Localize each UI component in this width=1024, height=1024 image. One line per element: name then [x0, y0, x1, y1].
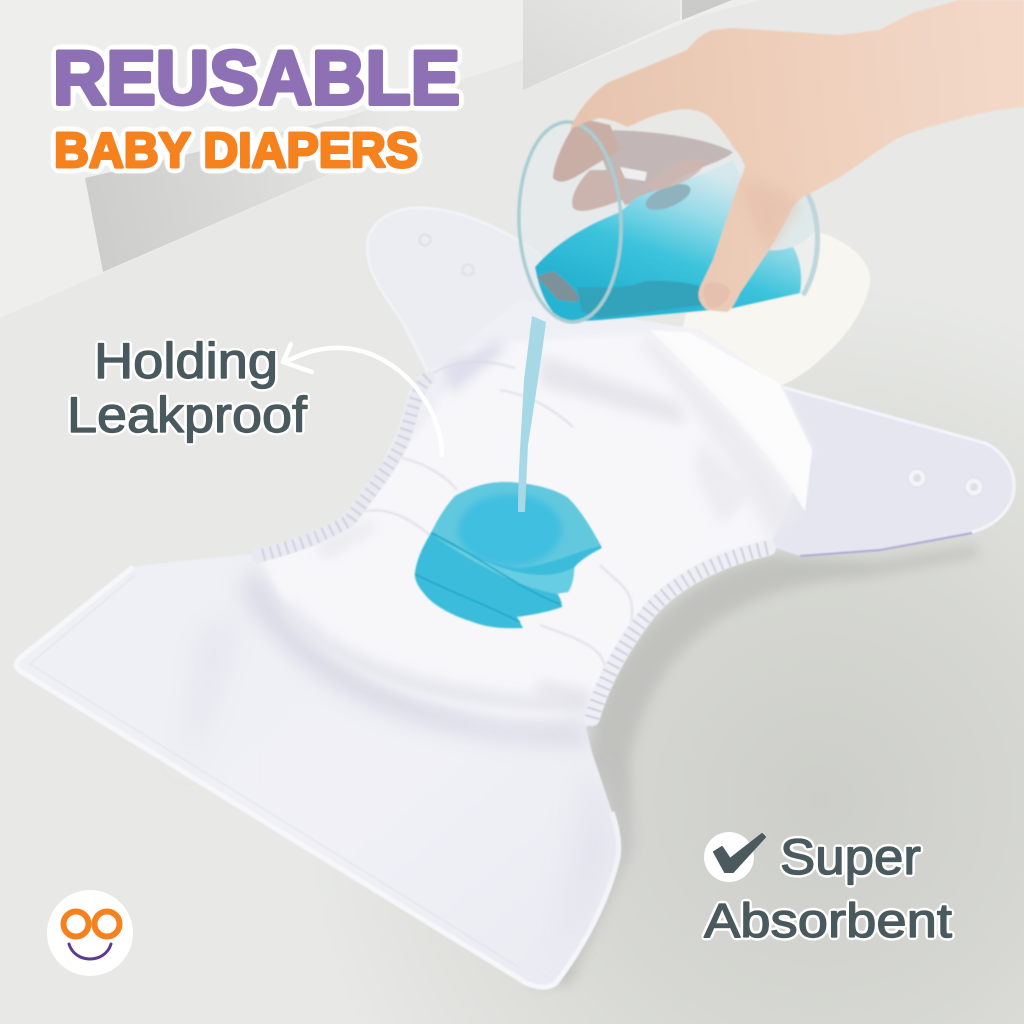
hand and arm — [570, 0, 1024, 312]
callout: super absorbent — [704, 829, 952, 948]
flap stitched rim — [16, 567, 619, 987]
stain crease — [415, 533, 560, 622]
lower fabric shading — [280, 600, 590, 714]
stain deep core — [458, 494, 562, 566]
right wing purple edge — [800, 533, 972, 556]
label line 2: Absorbent — [704, 895, 952, 948]
flap inner stitching — [30, 575, 520, 968]
subheading: baby diapers: BABY DIAPERS — [54, 124, 418, 178]
snap button right 1 — [908, 469, 926, 487]
diaper — [16, 208, 1014, 988]
left elastic gather — [258, 378, 428, 556]
snap button left 1 — [420, 234, 430, 246]
left elastic ridges — [258, 378, 428, 556]
label line 1: Holding — [94, 333, 278, 389]
liquid in glass — [535, 160, 801, 322]
main body and front flap — [16, 300, 812, 988]
pale reflection on glass — [645, 159, 705, 190]
top right fold — [650, 330, 812, 512]
back cream insert pad — [680, 230, 870, 386]
water stream — [518, 316, 546, 512]
callout: holding leakproof — [67, 333, 442, 455]
logo: smiley badge — [47, 890, 133, 976]
snap button left 2 — [462, 264, 474, 276]
flap soft creases — [185, 610, 615, 960]
pale glass end above liquid — [745, 170, 815, 250]
left back wing — [367, 208, 560, 420]
thumb reflection in liquid — [642, 179, 694, 215]
stain light upper zone — [432, 482, 600, 568]
title — [53, 36, 460, 178]
thumb nail shading — [703, 282, 730, 308]
heading: reusable: REUSABLE — [53, 36, 460, 121]
icon: check mark — [704, 832, 765, 882]
blue liquid stain — [415, 482, 602, 628]
right wing — [720, 387, 1014, 556]
right elastic gather — [592, 548, 768, 718]
glass and hand — [516, 0, 1024, 324]
label line 1: Super — [780, 829, 921, 885]
dark teal reflection — [577, 281, 703, 318]
center fabric folds — [315, 340, 750, 712]
arrow pointing to label — [283, 344, 442, 455]
label line 2: Leakproof — [67, 387, 307, 443]
glass rim — [516, 120, 624, 324]
inner pocket shadow crescent — [240, 565, 590, 745]
snap button right 2 — [965, 478, 983, 496]
diaper shadow on table — [530, 545, 980, 985]
white glass highlight — [620, 167, 647, 181]
palm crease shadow — [740, 180, 800, 250]
stain lower light band — [432, 535, 573, 594]
inner white fabric — [262, 330, 812, 716]
palm through glass — [600, 130, 733, 205]
finger through glass 2 — [572, 170, 630, 211]
fold shadow — [640, 335, 803, 540]
right elastic ridges — [592, 548, 768, 718]
glass body — [517, 123, 817, 322]
right wing rim — [782, 387, 1014, 532]
gather crease lines — [360, 362, 632, 690]
finger through glass 1 — [553, 118, 620, 182]
glass base — [803, 190, 818, 295]
grey reflection in liquid — [537, 272, 579, 302]
